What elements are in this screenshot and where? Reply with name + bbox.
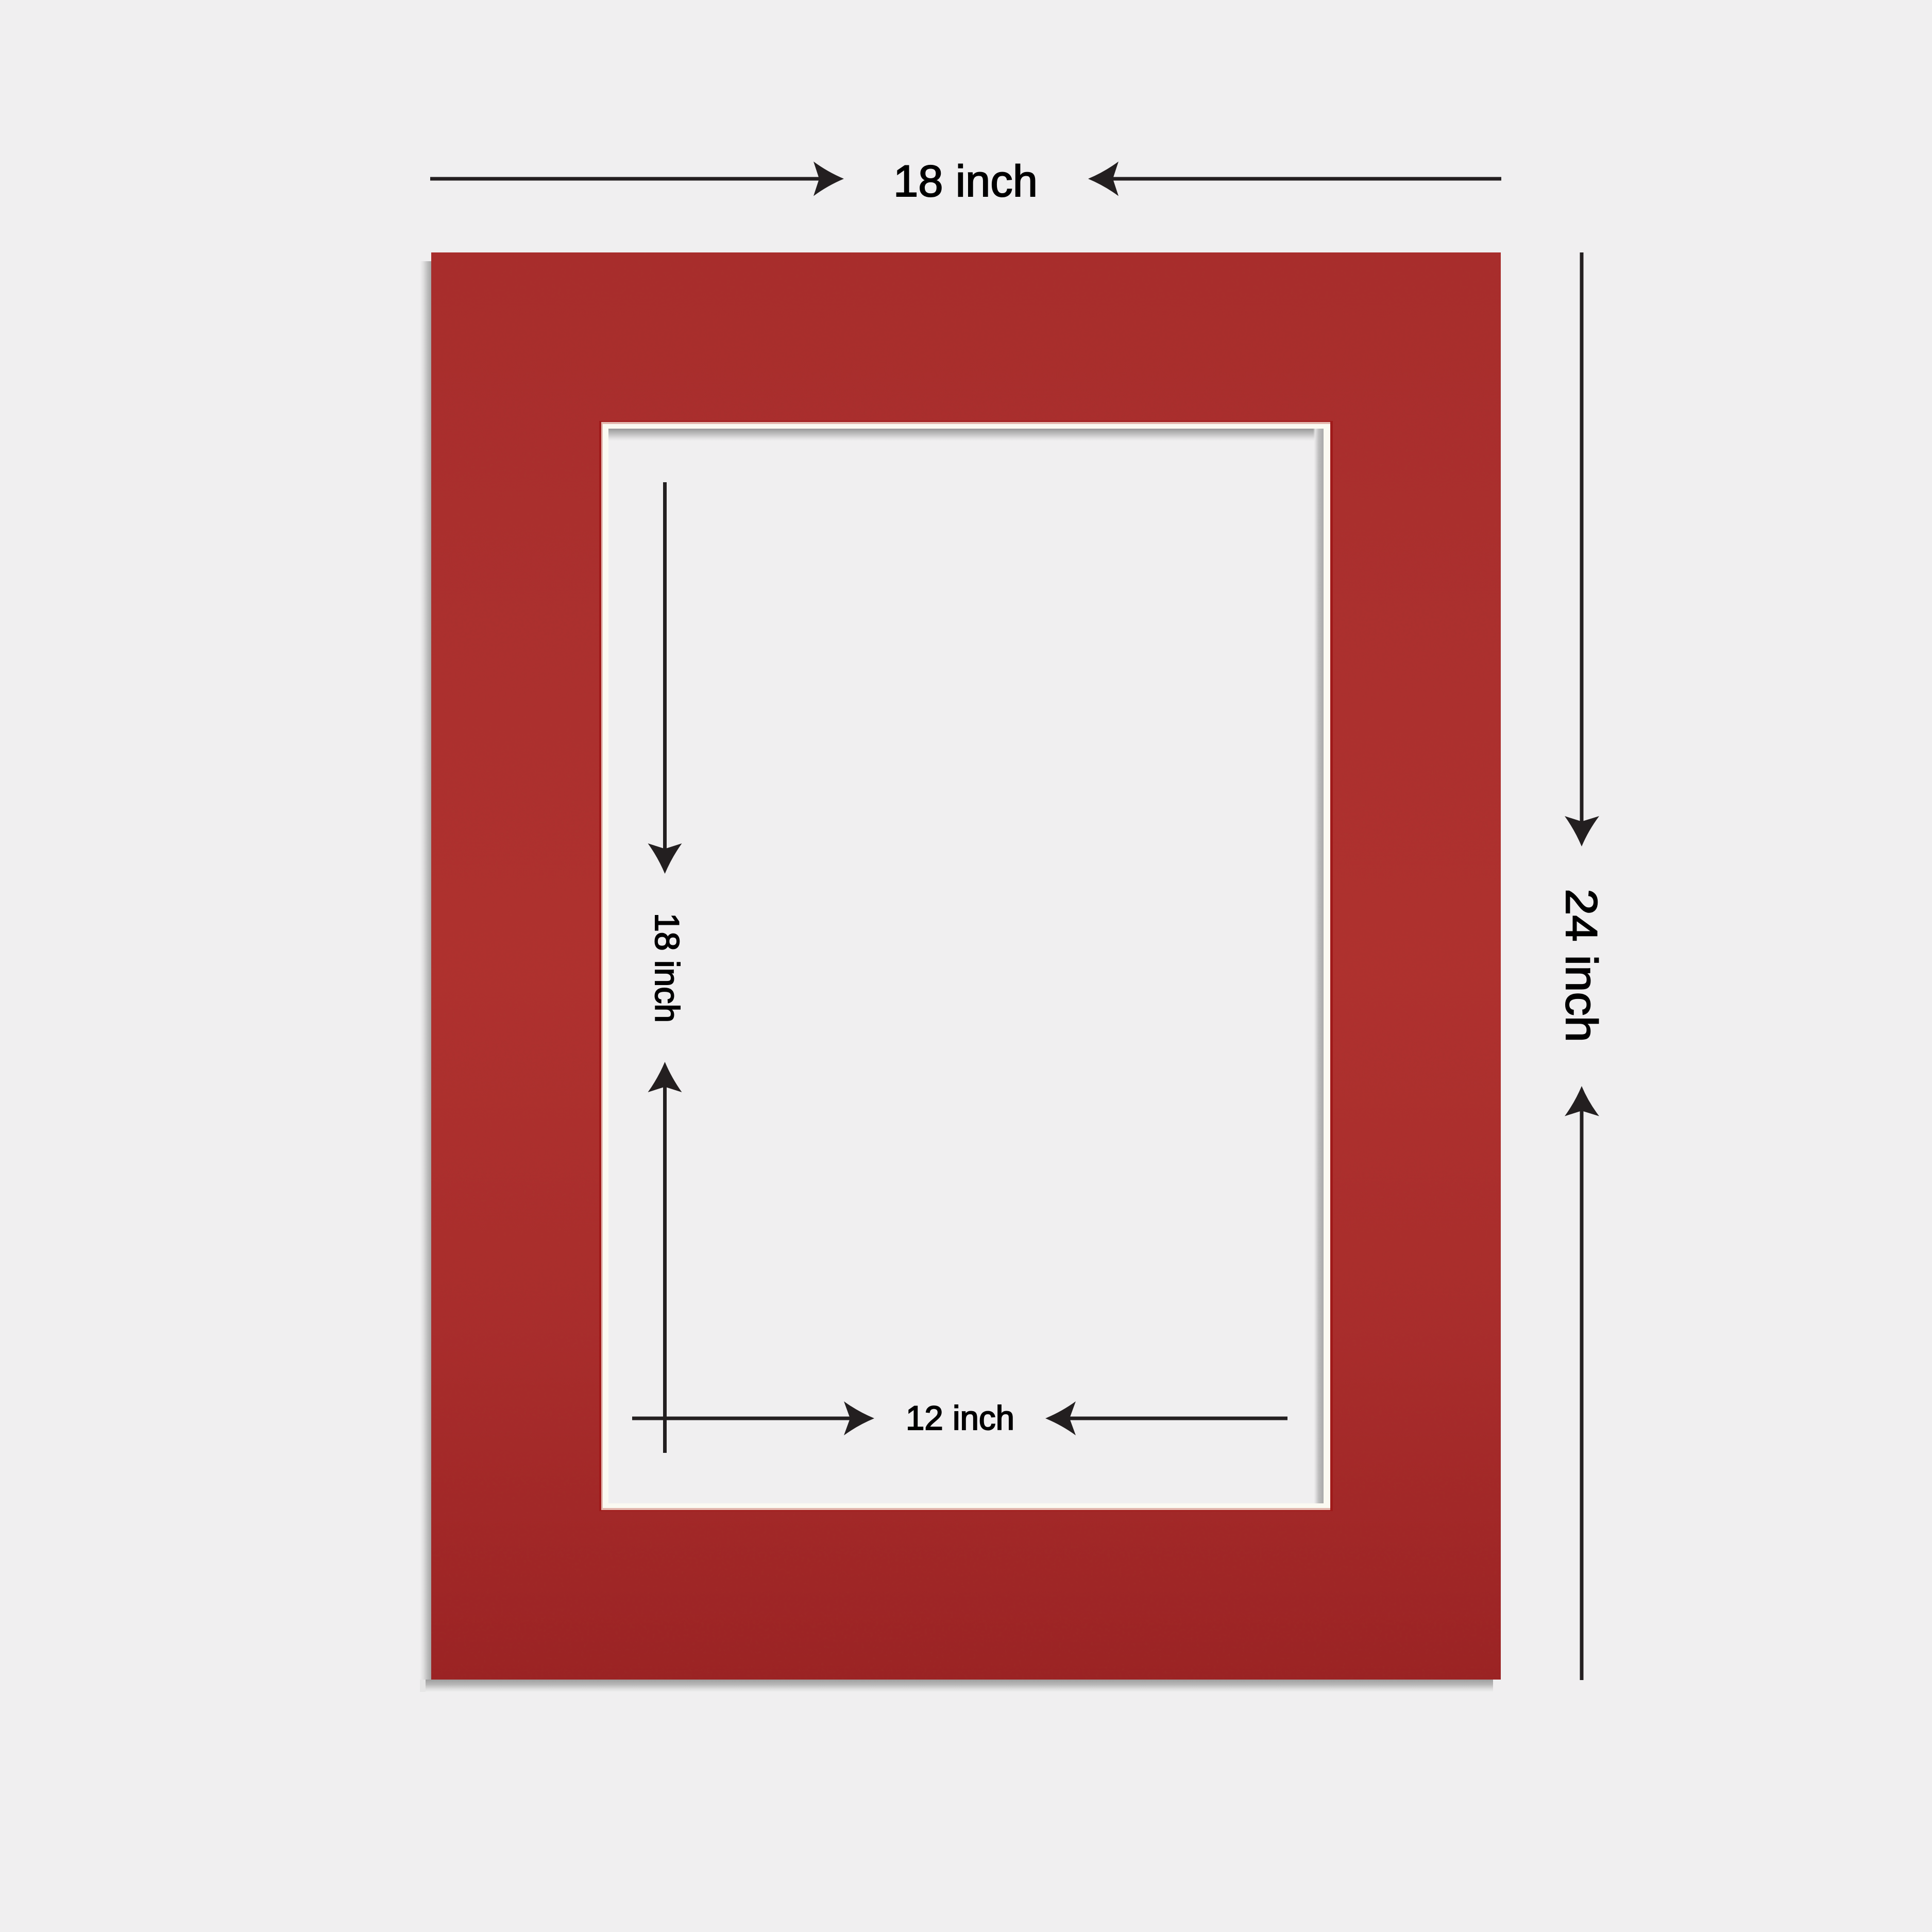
label: 18 inch inner height: 18 inch [648,913,686,1023]
mat board surface [431,252,1501,1680]
arrow: top pointing down [1565,252,1599,846]
arrow: right side pointing left [1088,162,1501,196]
outer width dimension: 18 inch [430,157,1501,206]
arrow: right side pointing left [1045,1401,1287,1435]
mat window opening [608,429,1324,1503]
arrow: left side pointing right [632,1401,874,1435]
outer height dimension: 24 inch [1556,252,1606,1680]
mat board drop shadow [420,261,1493,1692]
arrow: top pointing down [648,482,682,874]
inner height dimension: 18 inch [648,482,686,1453]
arrow: bottom pointing up [1565,1086,1599,1680]
label: 24 inch outer height: 24 inch [1556,889,1606,1042]
panel: red mat board [420,252,1501,1692]
arrow: left side pointing right [430,162,844,196]
arrow: bottom pointing up [648,1062,682,1453]
inner width dimension: 12 inch [632,1399,1287,1437]
mat window bevel [599,421,1333,1511]
label: 12 inch inner width: 12 inch [906,1399,1014,1437]
label: 18 inch outer width: 18 inch [893,157,1038,206]
